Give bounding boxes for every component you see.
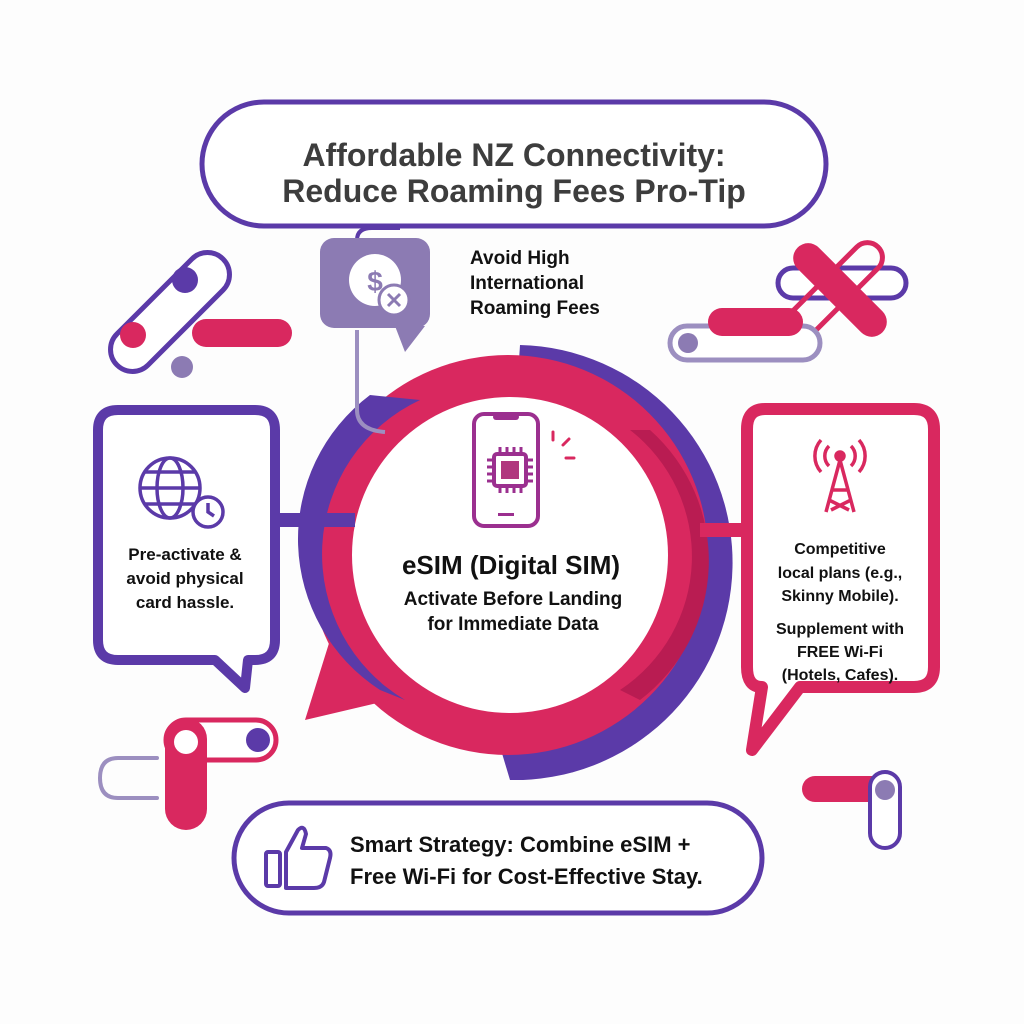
central circle bubble: for Immediate Data	[427, 614, 599, 635]
central circle bubble: Activate Before Landing	[404, 589, 622, 610]
panel: pre-activate (left)	[98, 410, 355, 688]
icon: phone with chip	[474, 414, 574, 526]
panel: local plans (right): local plans (e.g.,	[778, 565, 902, 582]
panel: local plans (right): (Hotels, Cafes).	[782, 667, 898, 684]
bottom strategy pill: Free Wi-Fi for Cost-Effective Stay.	[350, 864, 703, 889]
panel: local plans (right): Supplement with	[776, 621, 904, 638]
icon: thumbs up	[266, 828, 330, 888]
panel: pre-activate (left): avoid physical	[126, 569, 244, 588]
panel: local plans (right): FREE Wi-Fi	[797, 644, 883, 661]
text: avoid roaming fees: International	[470, 273, 584, 294]
panel: local plans (right): Skinny Mobile).	[781, 588, 899, 605]
title pill: Reduce Roaming Fees Pro-Tip	[282, 173, 746, 209]
icon: roaming fees bubble: $	[367, 266, 383, 297]
icon: cell tower	[815, 440, 865, 512]
panel: local plans (right)	[700, 409, 934, 750]
bottom strategy pill	[234, 803, 762, 913]
central circle bubble	[298, 345, 733, 780]
text: avoid roaming fees	[470, 248, 600, 319]
icon: roaming fees bubble	[320, 238, 430, 432]
text: avoid roaming fees: Avoid High	[470, 248, 570, 269]
panel: pre-activate (left): Pre-activate &	[128, 545, 242, 564]
connector: roaming to title	[357, 228, 400, 240]
decoration: bottom-left toggles	[100, 718, 276, 830]
central circle bubble: eSIM (Digital SIM)	[402, 550, 620, 580]
title pill	[202, 102, 826, 226]
title pill: Affordable NZ Connectivity:	[302, 137, 726, 173]
decoration: top-left toggles	[101, 243, 292, 381]
text: avoid roaming fees: Roaming Fees	[470, 298, 600, 319]
decoration: top-right toggles	[670, 236, 906, 364]
panel: pre-activate (left): card hassle.	[136, 593, 234, 612]
panel: local plans (right): Competitive	[794, 541, 886, 558]
bottom strategy pill: Smart Strategy: Combine eSIM +	[350, 832, 690, 857]
decoration: bottom-right toggles	[802, 772, 900, 848]
icon: globe with clock	[140, 458, 223, 527]
